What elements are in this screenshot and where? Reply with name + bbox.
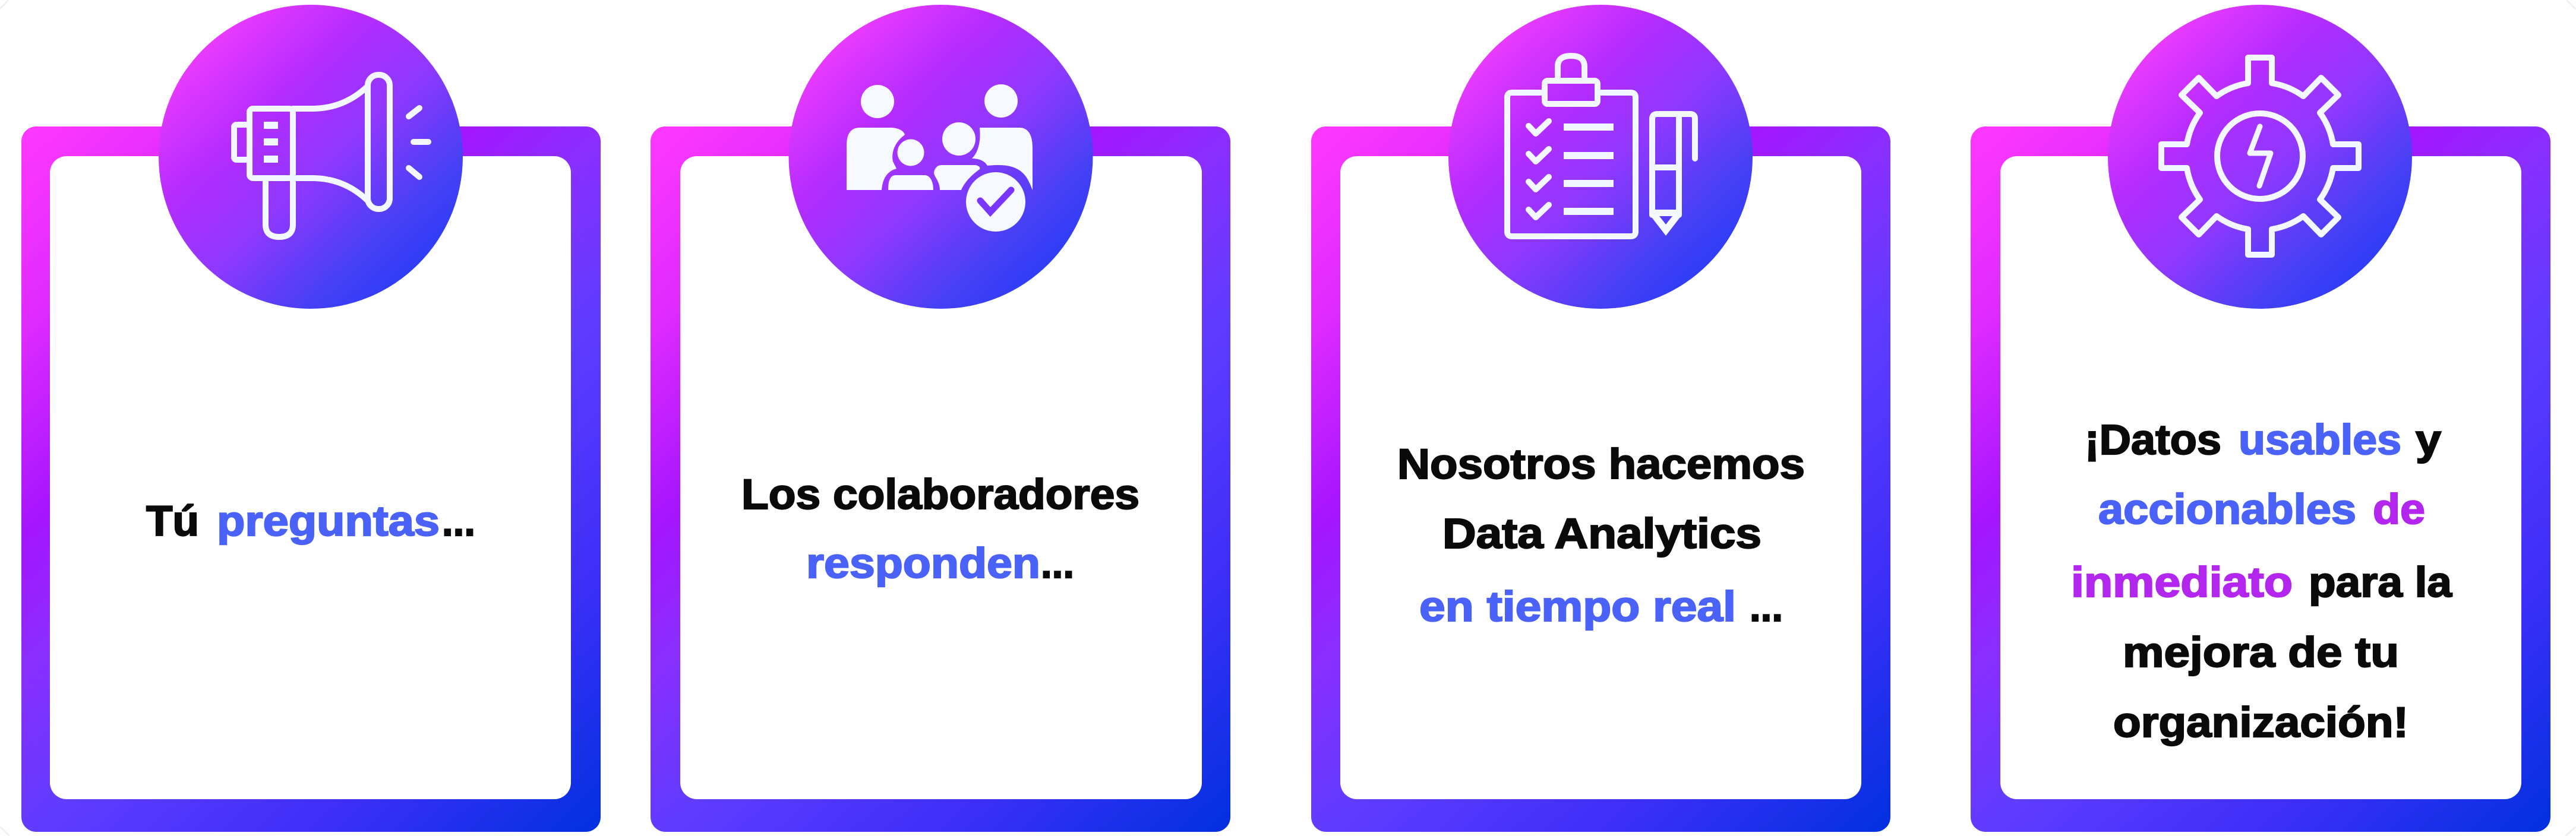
- text: Nosotros hacemos Data Analytics en tiempo real: Nosotros hacemos: [1397, 441, 1805, 488]
- text: Datos usables y accionables de inmediato para la mejora de tu organización: de: [2373, 486, 2425, 533]
- text: Datos usables y accionables de inmediato para la mejora de tu organización: accionables: [2098, 486, 2356, 533]
- frame 1: [21, 126, 601, 832]
- badge circle 3: [1448, 5, 1753, 309]
- badge circle 1: [159, 5, 463, 309]
- badge circle 2: [789, 5, 1093, 309]
- icon: gear with lightning bolt: [2161, 58, 2359, 255]
- text: Nosotros hacemos Data Analytics en tiempo real: Data Analytics: [1442, 511, 1761, 558]
- text: Datos usables y accionables de inmediato para la mejora de tu organización: [2071, 417, 2452, 746]
- text: Los colaboradores responden: [741, 471, 1139, 587]
- text: Tú preguntas: ...: [442, 498, 475, 545]
- text: Los colaboradores responden: ...: [1041, 540, 1074, 587]
- frame 4: [1971, 126, 2550, 832]
- frame 3: [1311, 126, 1890, 832]
- card 3: Nosotros hacemos Data Analytics: [1311, 5, 1890, 832]
- badge circle 4: [2108, 5, 2412, 309]
- text: Los colaboradores responden: Los colaboradores: [741, 471, 1139, 518]
- text: Datos usables y accionables de inmediato para la mejora de tu organización: inmediato: [2071, 559, 2293, 606]
- text: Tú preguntas: preguntas: [217, 498, 440, 545]
- text: Tú preguntas: Tú: [146, 498, 199, 545]
- text: Datos usables y accionables de inmediato para la mejora de tu organización: ¡Datos: [2085, 417, 2221, 464]
- text: Datos usables y accionables de inmediato para la mejora de tu organización: organización!: [2113, 699, 2408, 746]
- icon: people with check: [847, 84, 1033, 232]
- card 1: Tú preguntas: [21, 5, 601, 832]
- text: Datos usables y accionables de inmediato para la mejora de tu organización: y: [2416, 417, 2442, 464]
- icon: clipboard and pen: [1507, 56, 1695, 236]
- text: Datos usables y accionables de inmediato para la mejora de tu organización: mejora de tu: [2123, 629, 2399, 676]
- frame 2: [651, 126, 1230, 832]
- text: Nosotros hacemos Data Analytics en tiempo real: en tiempo real: [1419, 584, 1736, 631]
- text: Datos usables y accionables de inmediato para la mejora de tu organización: usables: [2239, 417, 2401, 464]
- card 2: Los colaboradores responden: [651, 5, 1230, 832]
- text: Datos usables y accionables de inmediato para la mejora de tu organización: para la: [2309, 559, 2452, 606]
- card 4: Datos usables y accionables: [1971, 5, 2550, 832]
- icon: megaphone: [234, 75, 428, 237]
- text: Los colaboradores responden: responden: [806, 540, 1040, 587]
- text: Nosotros hacemos Data Analytics en tiempo real: ...: [1750, 584, 1783, 631]
- text: Nosotros hacemos Data Analytics en tiempo real: [1397, 441, 1805, 631]
